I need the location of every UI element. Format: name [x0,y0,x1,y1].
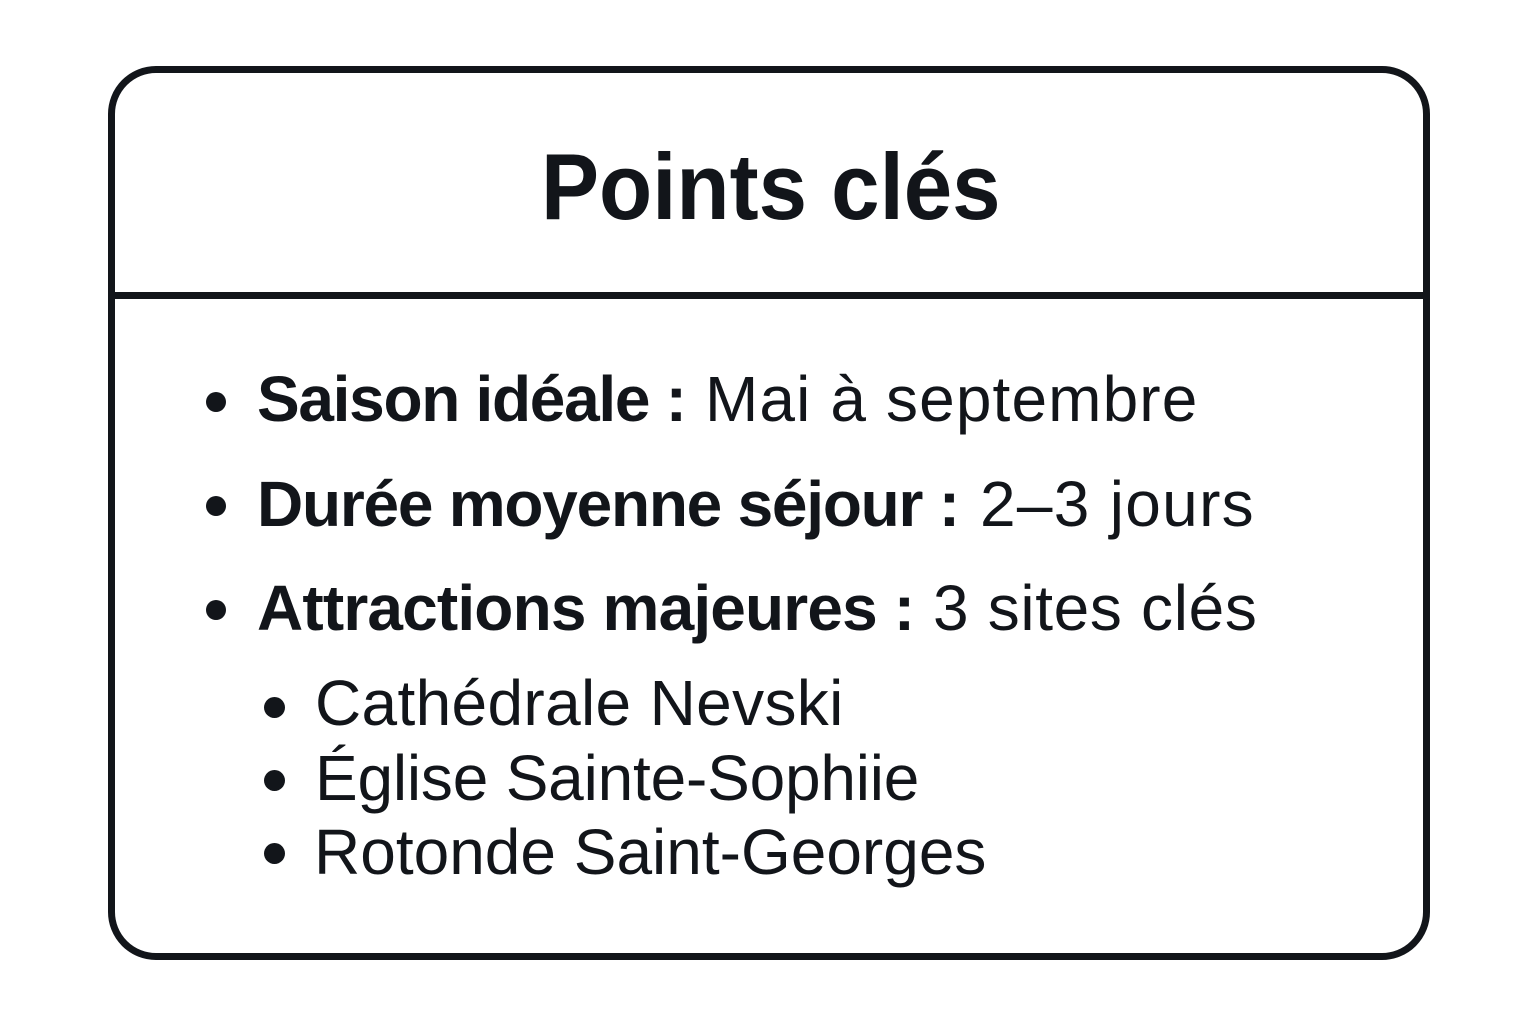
bullet [206,496,226,516]
bullet [264,770,285,791]
value: Mai à septembre [705,363,1198,435]
list item: saison idéale [206,363,1198,435]
text: Rotonde Saint-Georges [314,816,986,888]
bullet [206,392,226,412]
heading divider [108,292,1430,299]
label: Attractions majeures : [257,572,914,644]
bullet [264,697,285,718]
bullet [264,843,285,864]
value: 2–3 jours [980,468,1255,540]
sub-item: Église Sainte-Sophiie [264,742,919,814]
card border [108,66,1430,960]
value: 3 sites clés [933,572,1257,644]
text: Cathédrale Nevski [315,667,844,739]
title: Points clés [541,134,1001,239]
panel: key points card [108,66,1430,960]
list item: attractions majeures [206,572,1257,644]
bullet [206,600,226,620]
sub-item: Rotonde Saint-Georges [264,816,986,888]
list item: durée moyenne [206,468,1255,540]
label: Durée moyenne séjour : [257,468,959,540]
label: Saison idéale : [257,363,686,435]
sub-item: Cathédrale Nevski [264,667,844,739]
text: Église Sainte-Sophiie [315,742,919,814]
